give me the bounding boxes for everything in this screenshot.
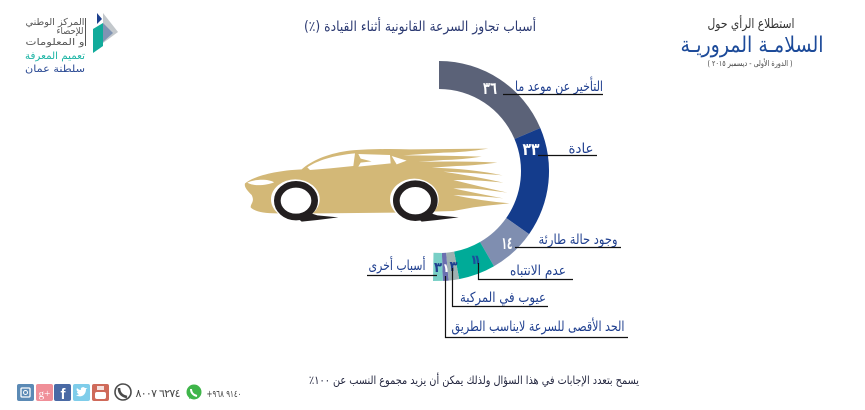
label: vehicle defects [452,268,548,306]
logo organisation name [26,17,86,48]
car windows [247,153,407,185]
segment: emergency 14 [480,218,529,266]
value 1: ١ [442,261,450,275]
value 36: ٣٦ [483,79,497,99]
value 11: ١ [470,253,478,268]
value 14: ١٤ [502,234,512,254]
icon: google plus: g+ [39,388,50,400]
whatsapp number: +٩٦٨ ٩١٤٠ [206,389,242,400]
segment: vehicle defects 3 [446,252,459,281]
value 3 vehicle: ٣ [450,259,458,275]
segment: inattention 11 [454,242,494,279]
icon: instagram [17,384,34,401]
survey intro line: استطلاع الرأي حول [708,15,794,32]
segment: speed limit 1 [442,253,449,281]
label: inattention: عدم الانتباه [510,263,566,279]
value labels [434,79,540,276]
logo country: سلطنة عمان [25,64,85,75]
car body [245,149,509,213]
label: vehicle defects: عيوب في المركبة [460,290,546,306]
value 3 other: ٣ [434,260,442,276]
survey heading [680,15,824,68]
label: speed limit: الحد الأقصى للسرعة لايناسب الطريق [452,317,624,335]
icon: facebook: f [60,386,66,403]
segment: other 3 [433,253,443,281]
footnote: يسمح بتعدد الإجابات في هذا السؤال ولذلك يمكن أن يزيد مجموع النسب عن ١٠٠٪ [309,372,639,388]
chart title: أسباب تجاوز السرعة القانونية أثناء القيادة (٪) [304,17,536,35]
value 11: ١ [474,253,481,268]
icon: facebook [54,384,71,403]
value 33: ٣٣ [522,140,540,160]
label: inattention [478,263,573,280]
label: emergency: وجود حالة طارئة [538,232,618,248]
label: habit: عادة [568,141,594,157]
segment: habit 33 [506,128,549,234]
segment: late 36 [439,61,540,139]
logo organisation name: للإحصاء [56,26,84,37]
semicircular chart [433,61,549,281]
phone number: ٨٠٠٧ ٦٢٧٤ [136,387,181,400]
logo mark [93,13,118,53]
label: other: أسباب أخرى [368,256,426,274]
icon: phone [115,384,131,400]
icon: youtube [92,384,109,401]
logo [25,13,118,75]
label: late: التأخير عن موعد ما [515,76,603,95]
label: emergency [515,232,621,248]
logo organisation name: و المعلومات [26,37,84,48]
car illustration [245,149,509,222]
survey topic: السلامـة المروريـة [680,33,824,58]
label: speed limit [446,276,628,338]
front wheel [271,179,338,222]
label: late [503,76,603,95]
social icons and contact [17,384,242,403]
icon: whatsapp [186,384,202,400]
icon: twitter [73,384,90,401]
logo tagline: تعميم المعرفة [25,51,85,62]
icon: google plus [36,384,53,401]
label: habit [538,141,597,157]
logo organisation name: المركز الوطني [26,17,84,28]
rear wheel [390,179,459,222]
survey edition: ( الدورة الأولى - ديسمبر ٢٠١٥ ) [708,58,792,68]
